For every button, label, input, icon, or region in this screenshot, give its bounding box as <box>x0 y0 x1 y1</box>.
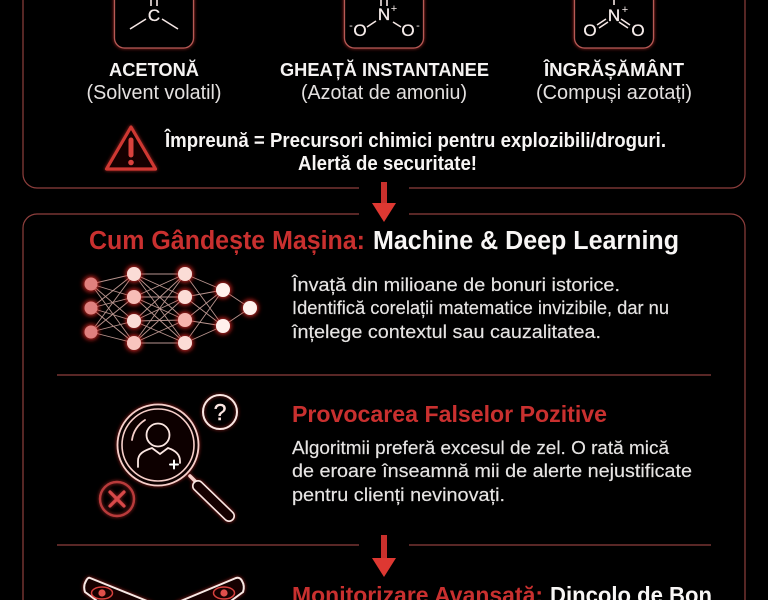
icon: acetone molecule: C <box>148 6 160 25</box>
icon: ammonium nitrate molecule: O <box>401 21 415 40</box>
text: false positives: Algoritmii preferă excesul de zel. O rată mică <box>292 437 670 458</box>
text: how machines learn <box>291 274 669 342</box>
icon: ammonium nitrate molecule <box>344 0 424 48</box>
panel: chemical precursors <box>23 0 745 188</box>
icon: question mark: ? <box>214 399 226 425</box>
icon: nitrogen compound molecule: N <box>608 6 620 25</box>
icon: surveillance eyes <box>84 578 244 600</box>
icon: nitrogen compound molecule: O <box>583 21 597 40</box>
text: false positives: de eroare înseamnă mii de alerte nejustificate <box>292 460 692 481</box>
label: acetone: ACETONĂ <box>109 59 199 80</box>
icon: neural network <box>84 267 257 350</box>
icon: nitrogen compound molecule <box>574 0 654 48</box>
label: fertilizer <box>536 59 692 104</box>
icon: ammonium nitrate molecule: N <box>378 5 390 24</box>
icon: warning triangle <box>106 127 156 169</box>
arrow: section connector <box>372 535 396 577</box>
arrow: panel connector <box>372 182 396 222</box>
panel: machine learning <box>23 214 745 600</box>
heading: false positives: Provocarea Falselor Pozitive <box>292 401 607 427</box>
label: instant ice <box>280 59 489 104</box>
text: how machines learn: înțelege contextul sau cauzalitatea. <box>291 321 601 342</box>
icon: nitrogen compound molecule: + <box>622 4 628 16</box>
label: instant ice: GHEAȚĂ INSTANTANEE <box>280 59 489 80</box>
security alert text: Împreună = Precursori chimici pentru explozibili/droguri. <box>164 128 666 152</box>
label: fertilizer: (Compuși azotați) <box>536 82 692 104</box>
icon: ammonium nitrate molecule: - <box>349 20 353 32</box>
label: fertilizer: ÎNGRĂȘĂMÂNT <box>543 59 685 80</box>
security alert text <box>164 128 666 175</box>
security alert text: Alertă de securitate! <box>298 153 477 175</box>
icon: ammonium nitrate molecule: - <box>416 20 420 32</box>
heading: machine thinking: Cum Gândește Mașina: <box>89 227 365 255</box>
icon: ammonium nitrate molecule: + <box>391 3 397 15</box>
text: how machines learn: Învață din milioane de bonuri istorice. <box>291 274 620 295</box>
text: how machines learn: Identifică corelații matematice invizibile, dar nu <box>292 297 669 318</box>
icon: nitrogen compound molecule: O <box>631 21 645 40</box>
label: acetone: (Solvent volatil) <box>86 82 222 104</box>
icon: acetone molecule <box>114 0 194 48</box>
text: false positives: pentru clienți nevinovați. <box>292 484 505 505</box>
heading: machine and deep learning: Machine & Deep Learning <box>373 227 679 255</box>
label: acetone <box>86 59 222 104</box>
text: false positives <box>292 437 692 505</box>
label: instant ice: (Azotat de amoniu) <box>301 82 467 104</box>
icon: ammonium nitrate molecule: O <box>353 21 367 40</box>
icon: magnifier with person <box>100 395 237 516</box>
